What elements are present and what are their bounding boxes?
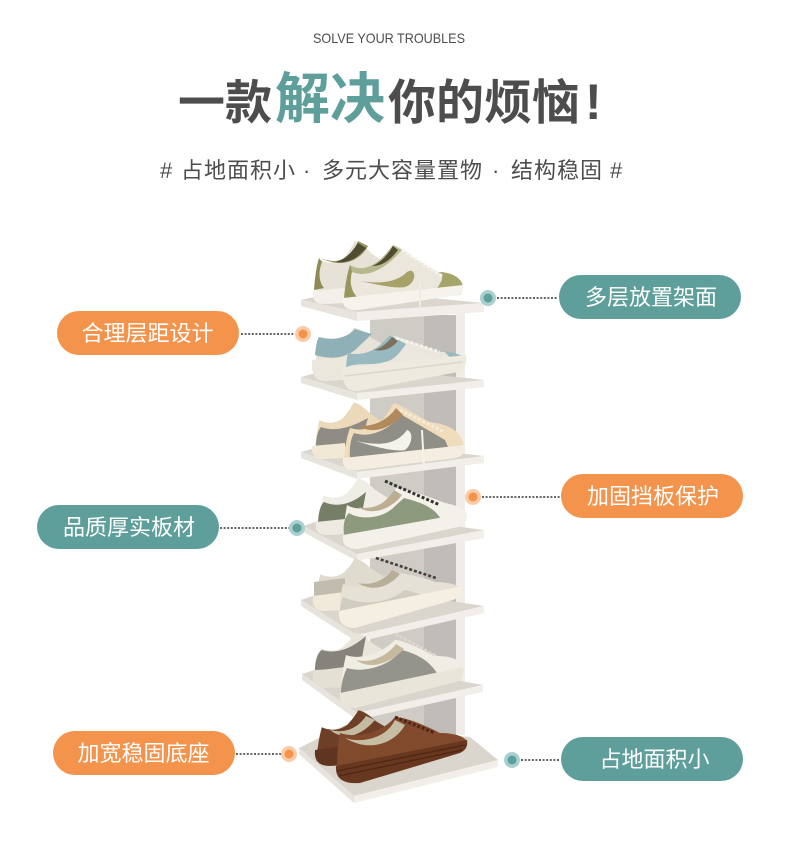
feature tagline: · (303, 158, 310, 183)
callout: 品质厚实板材 (37, 505, 305, 549)
title: 你的烦恼 (388, 77, 580, 130)
title: 一款 (178, 76, 272, 129)
shoes tier 2: blue (312, 328, 466, 391)
title: 解决 (275, 68, 385, 130)
title (178, 68, 602, 130)
title: ! (585, 74, 602, 130)
shelves (299, 290, 498, 803)
subtitle: SOLVE YOUR TROUBLES: SOLVE YOUR TROUBLES (313, 30, 465, 46)
feature tagline: # (610, 158, 623, 183)
feature tagline: 结构稳固 (511, 158, 603, 183)
callout: 加固挡板保护: 加固挡板保护 (587, 484, 719, 509)
callout: 多层放置架面: 多层放置架面 (585, 285, 717, 310)
callout: 占地面积小: 占地面积小 (599, 747, 710, 772)
feature tagline: · (492, 158, 499, 183)
feature tagline: 占地面积小 (181, 158, 296, 183)
feature tagline: 多元大容量置物 (322, 158, 483, 183)
callout: 占地面积小 (504, 737, 743, 781)
callout: 品质厚实板材: 品质厚实板材 (63, 515, 195, 540)
callout: 加固挡板保护 (465, 474, 743, 518)
rack back panels (370, 310, 465, 735)
feature tagline: # (160, 158, 173, 183)
callout: 加宽稳固底座: 加宽稳固底座 (77, 741, 210, 766)
shoes tier 7: brown (315, 710, 467, 783)
callout: 合理层距设计 (57, 311, 311, 355)
shoes tier 4: sage green (316, 478, 467, 549)
shoes tier 3: tan and grey (312, 402, 465, 470)
shoes tier 6: grey mesh (313, 632, 464, 708)
callout: 合理层距设计: 合理层距设计 (81, 321, 214, 346)
callout: 多层放置架面 (480, 275, 741, 319)
shoes tier 5: beige (313, 558, 462, 628)
callout: 加宽稳固底座 (53, 731, 297, 775)
shoes tier 1: olive (313, 241, 463, 310)
feature tagline (160, 158, 623, 183)
shoe rack illustration (299, 241, 498, 803)
